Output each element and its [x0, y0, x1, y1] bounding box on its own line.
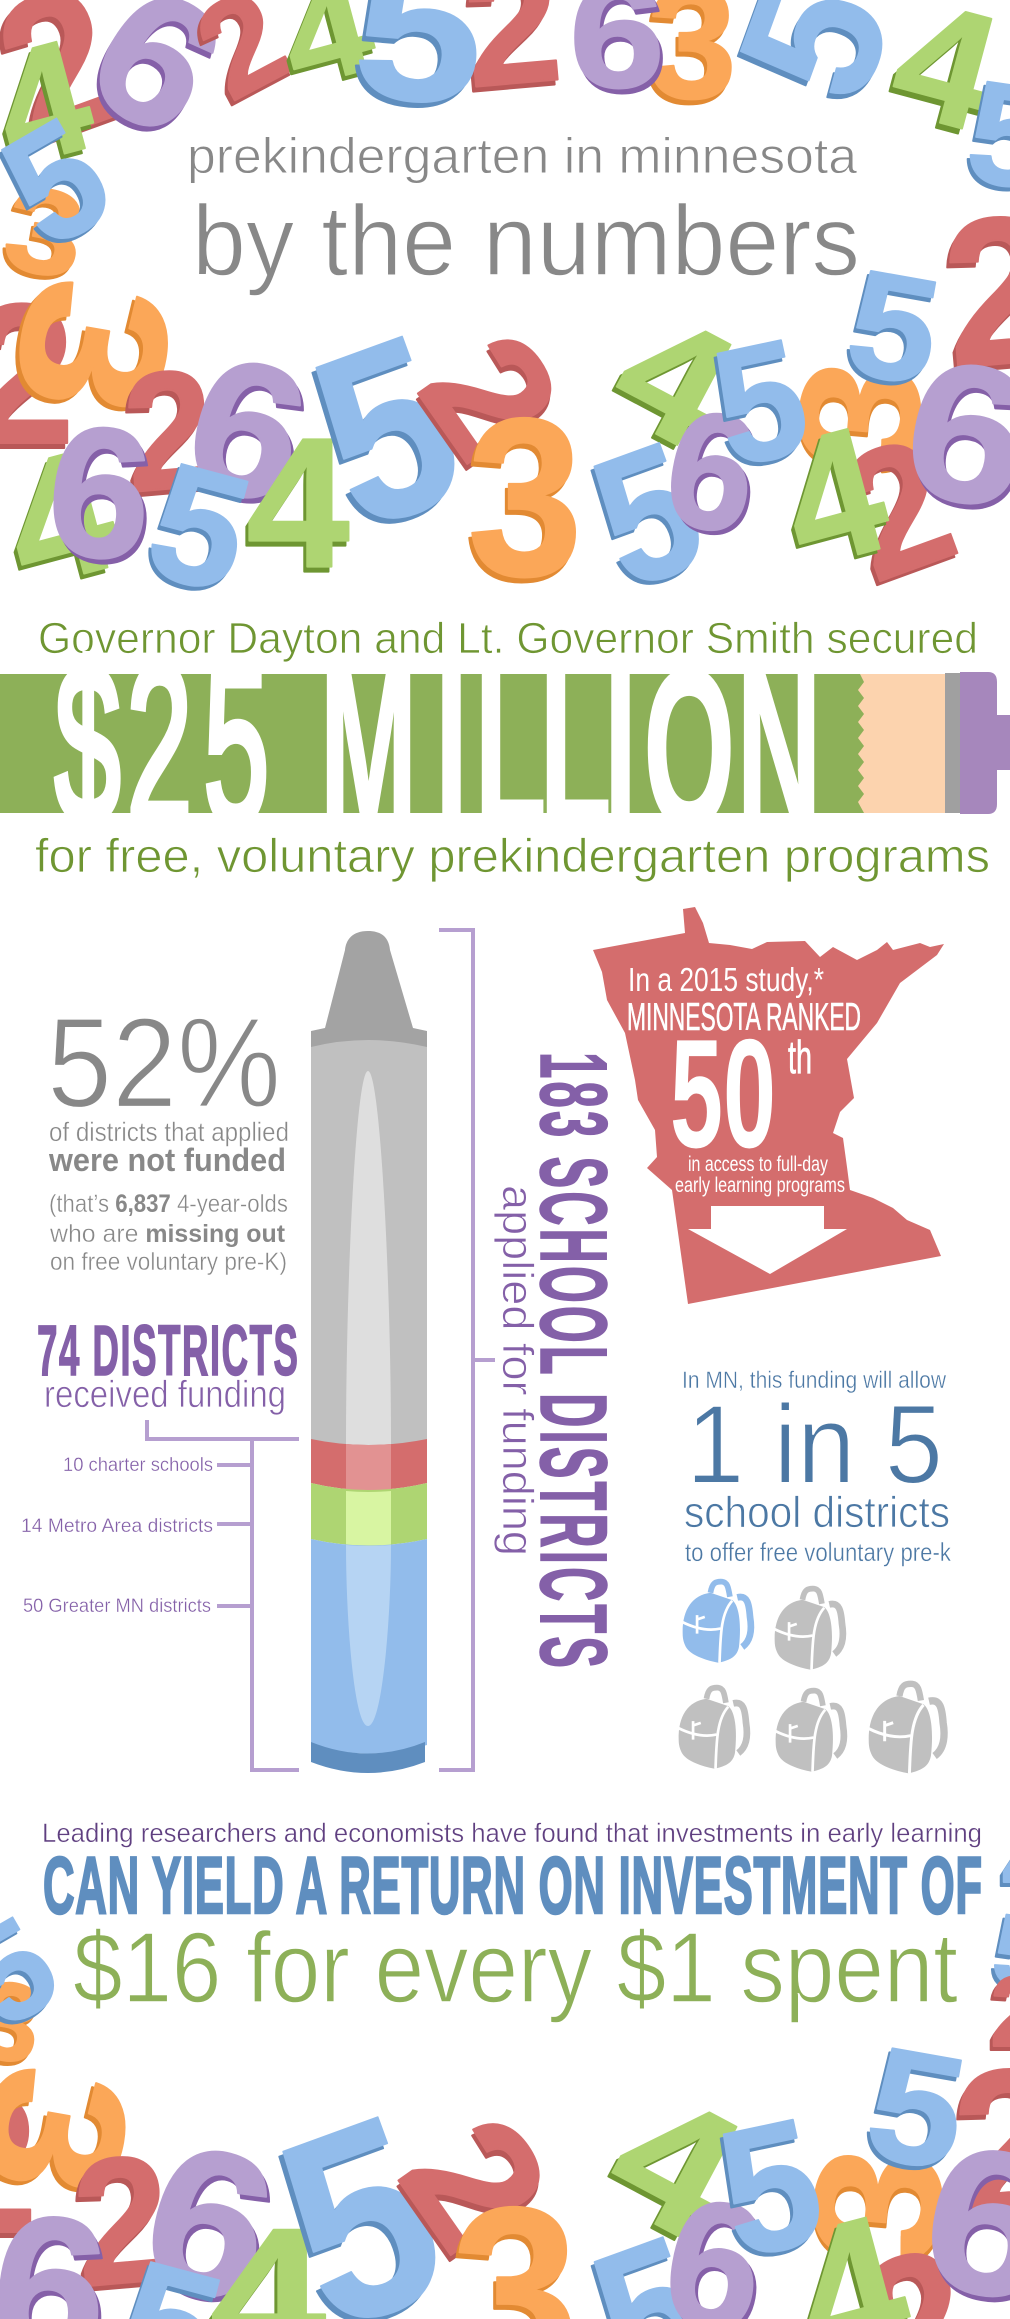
decorative numbers: footer border: 4 — [580, 2051, 771, 2280]
return on investment text: CAN YIELD A RETURN ON INVESTMENT OF — [43, 1840, 982, 1930]
decorative numbers: cluster under title: 5 — [128, 431, 265, 632]
decorative numbers: cluster under title: 5 — [836, 237, 951, 417]
decorative numbers: cluster under title: 6 — [39, 386, 160, 601]
icon: grey backpack 5 — [868, 1684, 944, 1773]
decorative numbers: cluster under title: 6 — [166, 314, 328, 547]
decorative numbers: cluster under title: 5 — [131, 427, 268, 628]
decorative numbers: cluster under title: 3 — [760, 358, 959, 483]
decorative numbers: cluster under title: 5 — [699, 304, 822, 502]
panel: 74 districts: 74 DISTRICTS — [37, 1311, 298, 1390]
panel: 1 in 5 school districts: 1 in 5 — [686, 1382, 943, 1507]
decorative numbers: footer border: 5 — [855, 2011, 978, 2204]
backpack icons — [678, 1582, 944, 1773]
decorative numbers: footer border: 3 — [773, 2144, 983, 2276]
$25 million: $25 — [55, 620, 269, 871]
panel: 1 in 5 school districts: to offer free voluntary pre-k — [685, 1537, 952, 1567]
decorative numbers: footer border: 5 — [700, 2084, 835, 2300]
ranking text — [627, 961, 861, 1197]
decorative numbers: cluster under title: 5 — [833, 241, 948, 421]
panel: not funded stat: who are missing out — [49, 1220, 286, 1248]
vertical label: 183 school districts: applied for funding — [493, 1185, 542, 1556]
decorative numbers: cluster under title: 4 — [762, 388, 906, 607]
funding subheading: for free, voluntary prekindergarten programs — [35, 829, 990, 882]
pencil eraser end — [858, 672, 1010, 814]
decorative numbers: cluster under title: 6 — [169, 319, 331, 552]
decorative numbers: cluster under title: 5 — [566, 407, 724, 632]
panel: not funded stat: on free voluntary pre-K) — [50, 1248, 287, 1276]
decorative numbers: cluster under title: 2 — [117, 333, 222, 528]
crayon grey section — [311, 1040, 427, 1445]
decorative numbers: cluster under title: 6 — [653, 374, 770, 570]
crayon green band — [311, 1483, 427, 1546]
icon: grey backpack 3 — [678, 1688, 747, 1769]
decorative numbers: cluster under title: 6 — [656, 378, 773, 574]
decorative numbers: cluster under title: 4 — [244, 406, 346, 612]
panel: 1 in 5 school districts: In MN, this funding will allow — [682, 1367, 947, 1394]
district labels: 10 charter schools — [63, 1455, 213, 1476]
icon: grey backpack 2 — [774, 1589, 843, 1670]
panel: 1 in 5 school districts — [682, 1367, 952, 1567]
decorative numbers: cluster under title: 5 — [696, 308, 819, 506]
decorative numbers: cluster under title — [0, 171, 1010, 632]
left bracket with district breakdown — [21, 1420, 299, 1770]
panel: 1 in 5 school districts: school districts — [684, 1488, 950, 1537]
title — [187, 128, 860, 297]
decorative numbers: cluster under title: 4 — [583, 278, 759, 488]
$25 million — [55, 620, 821, 875]
decorative numbers: footer border: 2 — [363, 2082, 588, 2284]
crayon bar chart — [311, 931, 427, 1773]
right bracket — [439, 930, 495, 1770]
district labels — [21, 1455, 213, 1617]
district labels: 14 Metro Area districts — [21, 1516, 213, 1537]
decorative numbers: footer border: 3 — [773, 2139, 983, 2271]
pencil body — [0, 674, 864, 813]
decorative numbers: footer border — [0, 1806, 1010, 2319]
panel: 74 districts: received funding — [44, 1374, 286, 1416]
decorative numbers: cluster under title: 2 — [816, 402, 974, 624]
district labels: 50 Greater MN districts — [23, 1596, 211, 1617]
decorative numbers: cluster under title: 2 — [114, 338, 219, 533]
decorative numbers: cluster under title: 2 — [384, 306, 597, 496]
ranking text: In a 2015 study,* — [628, 961, 824, 998]
title: prekindergarten in minnesota — [187, 128, 857, 184]
ranking text: in access to full-day — [688, 1153, 828, 1176]
decorative numbers: cluster under title: 4 — [247, 401, 349, 607]
decorative numbers: cluster under title: 4 — [759, 392, 903, 611]
decorative numbers: footer border: 4 — [576, 2055, 767, 2284]
panel: not funded stat: (that’s 6,837 4-year-olds — [49, 1190, 288, 1218]
decorative numbers: cluster under title: 5 — [279, 287, 488, 586]
decorative numbers: top border — [0, 0, 1010, 309]
decorative numbers: cluster under title: 3 — [467, 371, 583, 623]
title: by the numbers — [192, 185, 860, 297]
panel: not funded stat: of districts that applied — [49, 1117, 289, 1147]
decorative numbers: cluster under title: 3 — [464, 376, 580, 628]
decorative numbers: cluster under title: 2 — [819, 398, 977, 620]
down arrow — [688, 1206, 847, 1274]
return on investment text: Leading researchers and economists have found that investments in early learning — [42, 1818, 982, 1848]
decorative numbers: cluster under title: 3 — [760, 353, 959, 478]
decorative numbers: footer border: 5 — [852, 2015, 975, 2208]
panel: Minnesota state map — [593, 907, 944, 1304]
ranking text: th — [788, 1031, 812, 1083]
icon: blue backpack — [682, 1582, 751, 1663]
funding heading: Governor Dayton and Lt. Governor Smith secured — [38, 614, 978, 663]
vertical label: 183 school districts: 183 SCHOOL DISTRICTS — [521, 1052, 627, 1668]
ranking text: 50 — [670, 1007, 776, 1180]
crayon blue band — [311, 1539, 427, 1754]
panel: not funded stat — [47, 992, 289, 1276]
$25 million: MILLION — [320, 624, 821, 875]
crayon red band — [311, 1439, 427, 1490]
decorative numbers: cluster under title: 6 — [42, 391, 163, 606]
decorative numbers: cluster under title: 2 — [385, 300, 598, 490]
panel: not funded stat: were not funded — [48, 1142, 286, 1178]
state shape — [593, 907, 944, 1304]
decorative numbers: cluster under title: 5 — [283, 282, 492, 581]
decorative numbers: cluster under title: 5 — [569, 403, 727, 628]
decorative numbers: footer border: 5 — [703, 2080, 838, 2296]
decorative numbers: footer border: 2 — [362, 2088, 587, 2290]
decorative numbers: cluster under title: 4 — [587, 274, 763, 484]
pencil banner with $25 million — [0, 620, 1010, 875]
crayon dark base — [311, 1742, 425, 1773]
52 percent: 52% — [47, 992, 281, 1135]
ranking text: early learning programs — [675, 1174, 845, 1197]
icon: grey backpack 4 — [775, 1691, 844, 1772]
return on investment text — [42, 1818, 982, 2024]
